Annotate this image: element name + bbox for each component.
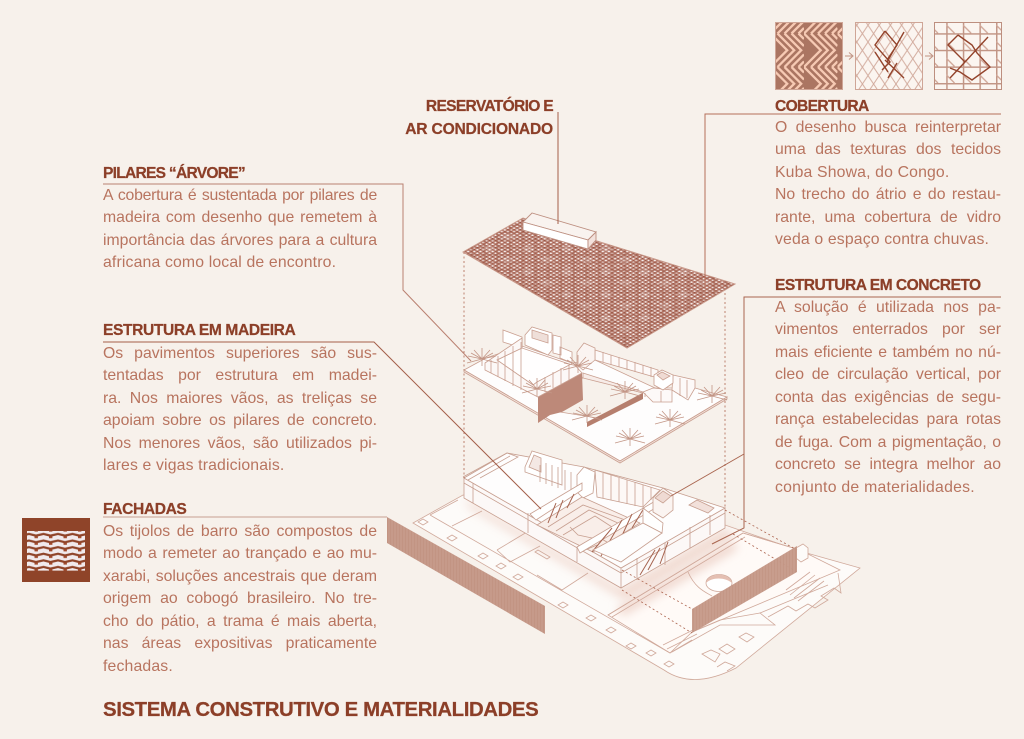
text: tree pillars [103,187,378,271]
courtyard opening [560,377,643,418]
text: facades: modo a remeter ao trançado e ao mu- [103,545,377,562]
text: roof: Kuba Showa, do Congo. [775,164,949,181]
large floor slab [593,523,662,562]
ground shadow [464,498,735,600]
text: concrete structure: vimentos enterrados por ser [775,321,1001,338]
facade brick icon [22,518,90,582]
text: timber structure: lares e vigas tradicionais. [103,457,284,474]
text: concrete structure: rança estabelecidas para rotas [775,411,1001,428]
text: concrete structure: mais eficiente e também no nú- [775,344,1001,361]
arrow [845,52,853,60]
text: tree pillars: importância das árvores para a cultura [103,232,377,249]
text: timber structure: apoiam sobre os pilares de concreto. [103,412,377,429]
text: roof: uma das texturas dos tecidos [775,141,1001,158]
roof lattice [463,218,735,348]
heading: reservoir: AR CONDICIONADO [405,120,553,138]
heading: roof: COBERTURA [775,98,869,115]
text: timber structure: Nos menores vãos, são utilizados pi- [103,435,377,452]
text: concrete structure: concreto se integra melhor ao [775,456,1001,473]
beams with diagonal bracing [530,483,582,520]
arrow [925,52,933,60]
text: facades: fechadas. [103,658,173,675]
text: concrete structure: conjunto de materialidades. [775,478,975,496]
main title: SISTEMA CONSTRUTIVO E MATERIALIDADES [103,699,538,721]
planters [418,519,674,667]
text: facades: xarabi, soluções ancestrais que deram [103,568,377,585]
heading: concrete structure: ESTRUTURA EM CONCRETO [775,277,981,294]
text: concrete structure: conta das exigências de segu- [775,389,1001,406]
text: roof: veda o espaço contra chuvas. [775,231,989,248]
text: tree pillars: madeira com desenho que remetem à [103,209,377,226]
inner plot lines [430,500,670,653]
text: roof: rante, uma cobertura de vidro [775,209,1001,226]
water tank and air conditioning block [523,213,596,249]
core [653,488,673,518]
dotted projection lines [464,252,797,633]
text: tree pillars: africana como local de encontro. [103,254,336,271]
back rooms [525,451,562,485]
heading: reservoir [405,96,554,138]
leader lines [103,112,1001,544]
facade panel left [387,517,545,634]
heading: facades: FACHADAS [103,501,186,518]
heading: reservoir: RESERVATÓRIO E [426,98,553,115]
stair court [537,497,640,552]
text: facades: Os tijolos de barro são compostos de [103,523,377,540]
right long wall and cores [595,350,658,378]
courtyard [608,533,840,653]
concrete walls [538,373,583,423]
heading: tree pillars: PILARES “ÁRVORE” [103,165,245,182]
back panels and room box [503,330,522,348]
text: concrete structure: A solução é utilizada nos pa- [775,299,1001,316]
text: roof: O desenho busca reinterpretar [775,119,1001,136]
text: concrete structure: cleo de circulação vertical, por [775,366,1001,383]
palms [467,348,727,446]
upper floor [464,327,727,463]
text: facades [103,523,377,675]
text: facades: cho do pátio, a trama é mais aberta, [103,613,377,630]
text: concrete structure: de fuga. Com a pigmentação, o [775,434,1001,451]
heading: timber structure: ESTRUTURA EM MADEIRA [103,322,295,339]
text: timber structure: Os pavimentos superiores são sus- [103,345,377,362]
pattern tile: structural grid [934,22,1002,90]
pattern tile: Kuba Showa textile [776,22,842,90]
ellipse court [706,574,732,592]
text: timber structure: ra. Nos maiores vãos, as treliças se [103,390,377,407]
left room [497,348,572,385]
facade panel right [692,546,797,633]
text: tree pillars: A cobertura é sustentada por pilares de [103,187,377,204]
text: facades: nas áreas expositivas praticamente [103,635,377,652]
text: concrete structure [775,299,1001,496]
text: timber structure [103,345,377,474]
text: roof [775,119,1001,248]
site plan [413,495,860,680]
text: facades: origem ao cobogó brasileiro. No tre- [103,590,377,607]
pattern tile: lattice [856,22,922,90]
lower floor [463,451,725,588]
text: roof: No trecho do átrio e do restau- [775,186,1001,203]
text: timber structure: tentadas por estrutura em madei- [103,367,377,384]
